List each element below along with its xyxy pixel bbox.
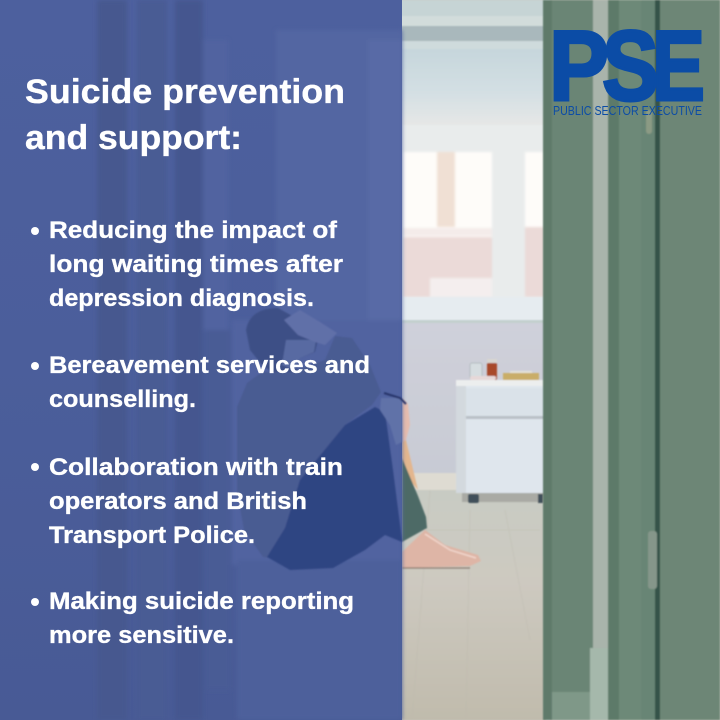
head — [246, 308, 318, 372]
panel: blue overlay with door and man — [0, 0, 406, 720]
lower leg skin — [402, 440, 418, 490]
logo: PSE: E — [652, 10, 705, 121]
bullet: suicide reporting: more sensitive. — [49, 622, 234, 649]
photo: green door frame — [543, 0, 720, 720]
logo: PSE — [549, 10, 705, 121]
bullet: collaboration: Transport Police. — [49, 522, 255, 549]
bullet: bereavement services: Bereavement services and — [49, 352, 370, 379]
bullet: bereavement services: counselling. — [49, 386, 196, 413]
bullet: suicide reporting — [31, 588, 354, 649]
door stripes behind overlay — [97, 0, 402, 720]
cabinet with medicine and book — [456, 359, 545, 503]
torso and arm — [237, 336, 381, 560]
bullet: reducing waiting times: depression diagnosis. — [49, 285, 314, 312]
logo: PSE: S — [602, 10, 659, 121]
title: and support: — [25, 119, 242, 157]
icon: medicine bottle — [487, 359, 497, 380]
bullet: suicide reporting: Making suicide reporting — [49, 588, 354, 615]
bullet: reducing waiting times: Reducing the impact of — [49, 217, 338, 244]
cabinet body — [456, 380, 545, 493]
title — [25, 73, 345, 157]
icon: book — [503, 371, 539, 380]
logo: PSE: P — [549, 10, 609, 121]
photo: man's feet and lower leg — [402, 398, 481, 568]
icon: bare feet — [402, 530, 481, 568]
bullet: reducing waiting times — [31, 217, 343, 312]
bullet: collaboration: operators and British — [49, 488, 307, 515]
bullet: reducing waiting times: long waiting times after — [49, 251, 343, 278]
photo: bright room interior — [400, 0, 550, 720]
trousers — [402, 458, 427, 542]
man sitting with head in hand — [237, 308, 406, 570]
hand on knee — [402, 398, 410, 442]
title: Suicide prevention — [25, 73, 345, 111]
leg — [267, 407, 402, 570]
hand on knee — [380, 398, 402, 445]
hand on head — [284, 310, 337, 345]
bullet: collaboration — [31, 454, 343, 549]
icon: glass jar — [470, 363, 482, 379]
bullet: collaboration: Collaboration with train — [49, 454, 343, 481]
bullet: bereavement services — [31, 352, 370, 413]
icon: cabinet wheels — [468, 494, 543, 503]
